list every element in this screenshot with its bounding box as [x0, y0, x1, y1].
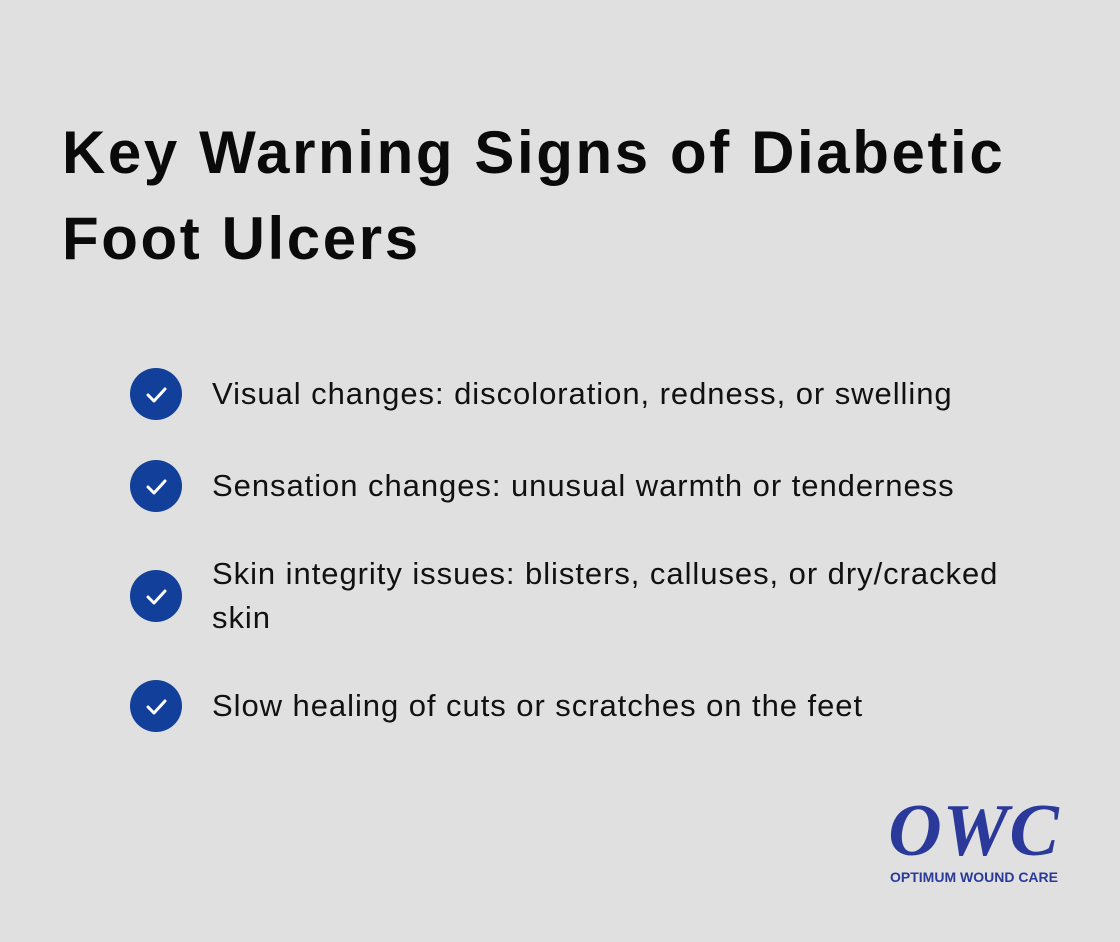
- logo: OPTIMUM WOUND CARE: [890, 869, 1058, 885]
- item: skin integrity: [130, 556, 998, 635]
- title: Key Warning Signs of Diabetic: [62, 119, 1005, 186]
- text: skin: [212, 600, 271, 635]
- logo: OWC: [888, 790, 1060, 872]
- item: visual changes: [130, 368, 953, 420]
- icon: check: [130, 680, 182, 732]
- item: slow healing: [130, 680, 863, 732]
- icon: check: [130, 570, 182, 622]
- title: [62, 119, 1005, 272]
- text: [212, 556, 998, 635]
- title: Foot Ulcers: [62, 205, 421, 272]
- text: Visual changes: discoloration, redness, or swelling: [212, 376, 953, 411]
- icon: check: [130, 368, 182, 420]
- item: sensation changes: [130, 460, 955, 512]
- text: Sensation changes: unusual warmth or tenderness: [212, 468, 955, 503]
- text: Slow healing of cuts or scratches on the feet: [212, 688, 863, 723]
- icon: check: [130, 460, 182, 512]
- text: Skin integrity issues: blisters, calluses, or dry/cracked: [212, 556, 998, 591]
